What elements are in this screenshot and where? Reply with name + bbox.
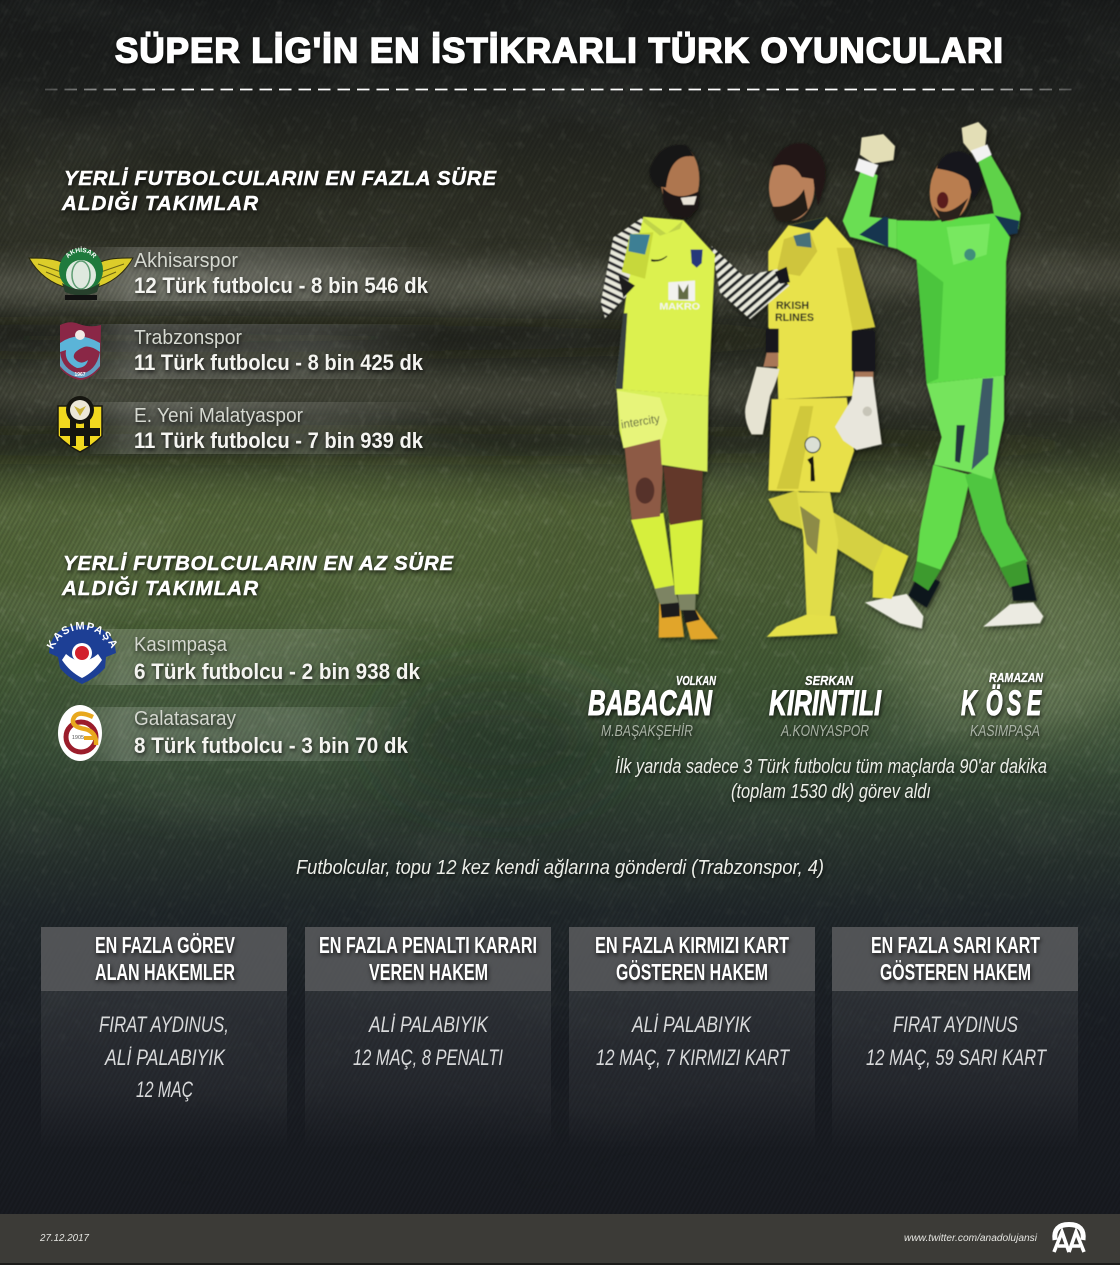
icon: Trabzonspor crest bbox=[60, 322, 101, 380]
player: Volkan Babacan bbox=[601, 145, 790, 639]
label: Serkan Kırıntılı: A.KONYASPOR bbox=[780, 723, 869, 740]
heading: least minutes: YERLİ FUTBOLCULARIN EN AZ SÜRE bbox=[63, 552, 454, 575]
icon: AA logo bbox=[1054, 1224, 1084, 1252]
text: Trabzonspor bbox=[134, 327, 424, 375]
text: Trabzonspor: 11 Türk futbolcu - 8 bin 425 dk bbox=[134, 350, 424, 375]
heading: least minutes bbox=[61, 552, 454, 600]
panel body text bbox=[866, 1012, 1047, 1070]
panel heading: EN FAZLA KIRMIZI KART bbox=[595, 932, 789, 958]
panel heading: EN FAZLA PENALTI KARARI bbox=[319, 932, 537, 958]
icon: Akhisarspor crest bbox=[28, 246, 134, 300]
footer bar bbox=[0, 1214, 1120, 1265]
label: Volkan Babacan: M.BAŞAKŞEHİR bbox=[601, 721, 693, 740]
panel body text: 12 MAÇ, 8 PENALTI bbox=[353, 1045, 503, 1070]
text: Galatasaray: 8 Türk futbolcu - 3 bin 70 dk bbox=[134, 733, 409, 758]
panel heading: GÖSTEREN HAKEM bbox=[616, 959, 768, 985]
row: Akhisarspor bbox=[28, 246, 430, 301]
label: Volkan Babacan bbox=[588, 673, 716, 740]
row: Malatyaspor bbox=[58, 396, 440, 454]
text: Malatyaspor: E. Yeni Malatyaspor bbox=[134, 405, 303, 427]
panel body text: FIRAT AYDINUS, bbox=[99, 1012, 229, 1037]
panel heading bbox=[319, 932, 537, 985]
panel body text bbox=[596, 1012, 790, 1070]
panel: least minutes teams bbox=[46, 552, 456, 761]
label: Serkan Kırıntılı: KIRINTILI bbox=[769, 684, 882, 723]
icon: Galatasaray crest bbox=[58, 705, 102, 761]
panel body text: ALİ PALABIYIK bbox=[103, 1045, 226, 1070]
text: Galatasaray: Galatasaray bbox=[134, 708, 236, 730]
icon: Akhisarspor crest: AKHİSAR bbox=[66, 246, 96, 258]
label: Volkan Babacan: BABACAN bbox=[588, 684, 713, 723]
panel heading: GÖSTEREN HAKEM bbox=[880, 959, 1031, 985]
player: Serkan Kırıntılı bbox=[745, 143, 908, 637]
caption: 90 minute players bbox=[615, 756, 1047, 803]
heading: most minutes: YERLİ FUTBOLCULARIN EN FAZLA SÜRE bbox=[64, 167, 497, 190]
player: Volkan Babacan: intercity bbox=[620, 413, 661, 432]
label: Serkan Kırıntılı: SERKAN bbox=[805, 673, 854, 688]
text: Akhisarspor bbox=[134, 250, 429, 298]
text: Galatasaray bbox=[134, 708, 409, 758]
icon: Trabzonspor crest: 1967 bbox=[74, 372, 86, 378]
player: Serkan Kırıntılı: RKISH bbox=[776, 300, 809, 312]
panel: most yellow cards referee bbox=[832, 927, 1078, 1150]
text: Akhisarspor: Akhisarspor bbox=[134, 250, 238, 272]
label: Serkan Kırıntılı bbox=[769, 673, 882, 740]
row: Kasımpaşa bbox=[46, 622, 422, 685]
label: Ramazan Köse: KÖSE bbox=[961, 684, 1042, 723]
label: Volkan Babacan: VOLKAN bbox=[676, 673, 716, 688]
text: Trabzonspor: Trabzonspor bbox=[134, 327, 242, 349]
panel heading bbox=[95, 932, 235, 985]
panel: most assigned referees bbox=[41, 927, 287, 1150]
player: Ramazan Köse bbox=[843, 122, 1043, 628]
panel body text: FIRAT AYDINUS bbox=[893, 1012, 1018, 1037]
text: Kasımpaşa bbox=[134, 634, 421, 684]
text: Malatyaspor: 11 Türk futbolcu - 7 bin 939 dk bbox=[134, 428, 424, 453]
text: Kasımpaşa: 6 Türk futbolcu - 2 bin 938 dk bbox=[134, 659, 421, 684]
source url: www.twitter.com/anadolujansi bbox=[904, 1233, 1038, 1244]
panel heading bbox=[595, 932, 789, 985]
panel body text: ALİ PALABIYIK bbox=[367, 1012, 489, 1037]
row: Galatasaray bbox=[58, 705, 420, 761]
text: Akhisarspor: 12 Türk futbolcu - 8 bin 546 dk bbox=[134, 273, 429, 298]
caption: own goals: Futbolcular, topu 12 kez kendi ağlarına gönderdi (Trabzonspor, 4) bbox=[296, 857, 824, 879]
icon: Yeni Malatyaspor crest bbox=[58, 396, 102, 452]
icon: Kasımpaşa crest bbox=[46, 622, 117, 684]
heading: least minutes: ALDIĞI TAKIMLAR bbox=[61, 576, 258, 600]
label: Ramazan Köse: KASIMPAŞA bbox=[970, 723, 1040, 740]
player: Volkan Babacan: MAKRO bbox=[659, 302, 700, 313]
text: Kasımpaşa: Kasımpaşa bbox=[134, 634, 228, 656]
row: Trabzonspor bbox=[60, 322, 440, 380]
panel heading: EN FAZLA GÖREV bbox=[95, 932, 235, 958]
players photo group bbox=[601, 122, 1043, 639]
panel: most penalties referee bbox=[305, 927, 551, 1150]
label: Ramazan Köse bbox=[961, 670, 1043, 740]
panel body text: ALİ PALABIYIK bbox=[630, 1012, 752, 1037]
panel heading: EN FAZLA SARI KART bbox=[871, 932, 1040, 958]
panel body text bbox=[353, 1012, 503, 1070]
caption: 90 minute players: (toplam 1530 dk) görev aldı bbox=[731, 781, 931, 803]
panel heading: ALAN HAKEMLER bbox=[95, 959, 235, 985]
heading: most minutes bbox=[61, 167, 497, 215]
panel: most minutes teams bbox=[28, 167, 498, 454]
panel heading bbox=[871, 932, 1040, 985]
text: Malatyaspor bbox=[134, 405, 424, 453]
icon: Galatasaray crest: 1905 bbox=[72, 735, 84, 741]
panel: most red cards referee bbox=[569, 927, 815, 1150]
date: 27.12.2017 bbox=[39, 1233, 89, 1244]
panel body text bbox=[99, 1012, 229, 1102]
title: SÜPER LİG'İN EN İSTİKRARLI TÜRK OYUNCULARI bbox=[115, 32, 1003, 70]
panel body text: 12 MAÇ, 59 SARI KART bbox=[866, 1045, 1047, 1070]
panel heading: VEREN HAKEM bbox=[369, 959, 488, 985]
panel body text: 12 MAÇ bbox=[136, 1077, 193, 1102]
heading: most minutes: ALDIĞI TAKIMLAR bbox=[61, 191, 258, 215]
panel body text: 12 MAÇ, 7 KIRMIZI KART bbox=[596, 1045, 790, 1070]
icon: Kasımpaşa crest: KASIMPAŞA bbox=[46, 622, 117, 650]
player names bbox=[588, 670, 1043, 740]
label: Ramazan Köse: RAMAZAN bbox=[989, 670, 1043, 685]
player: Serkan Kırıntılı: RLINES bbox=[775, 312, 814, 324]
